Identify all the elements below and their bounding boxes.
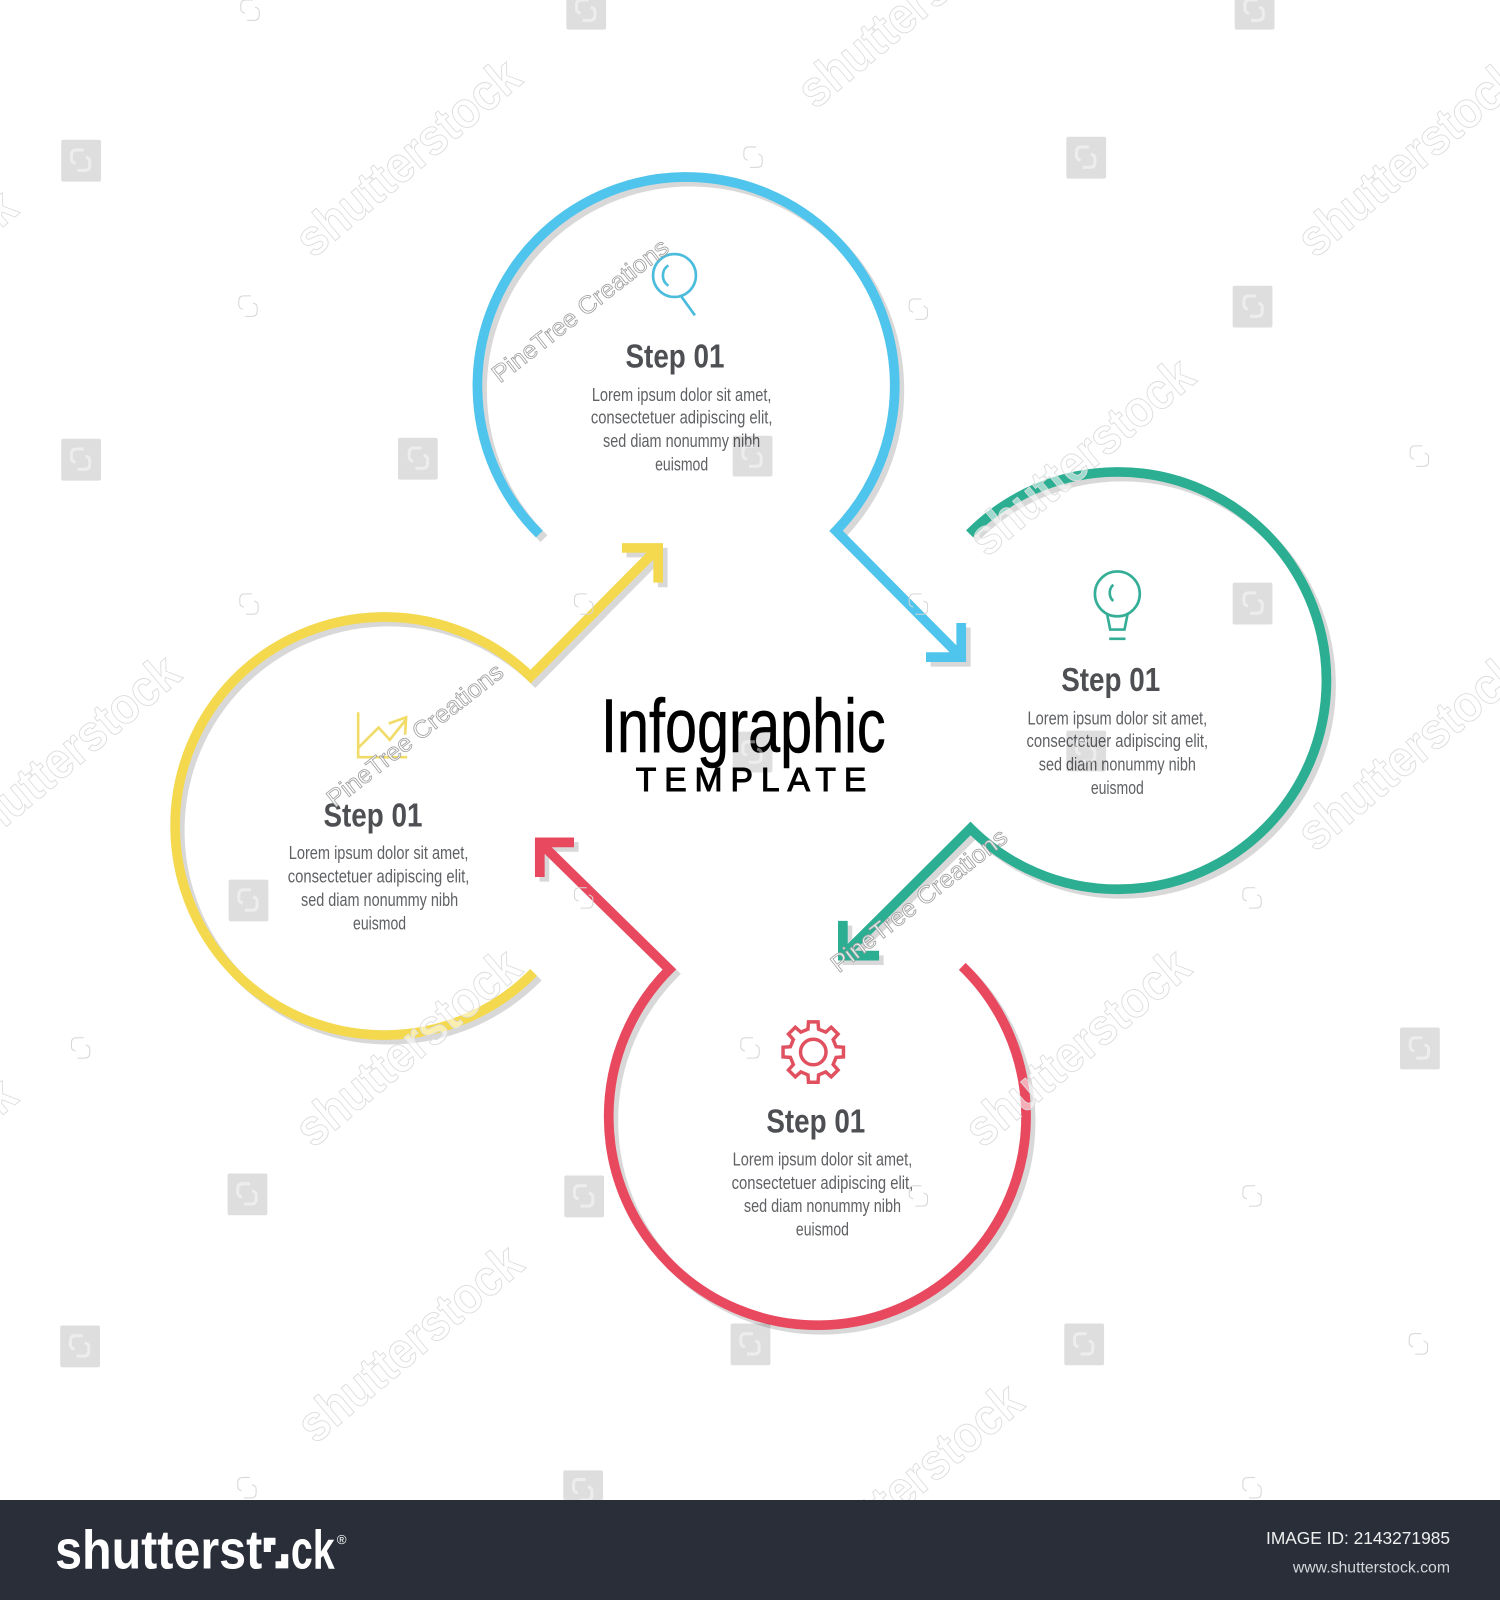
text block: blue step: euismod bbox=[655, 453, 708, 474]
icon: growth chart bbox=[358, 712, 407, 757]
footer logo: shutterst bbox=[55, 1518, 262, 1580]
panel: step blue (top) bbox=[477, 177, 966, 662]
text block: yellow step: sed diam nonummy nibh bbox=[301, 889, 458, 910]
red loop with arrow bbox=[540, 842, 1031, 1330]
footer logo: o bbox=[264, 1518, 298, 1580]
blue loop with arrow bbox=[477, 177, 966, 662]
watermark: PineTree Creations: PineTree Creations bbox=[322, 658, 509, 813]
heading: step 01: Step 01 bbox=[323, 798, 422, 835]
watermark: shutterstock wordmarks: shutterstock bbox=[286, 1232, 534, 1453]
watermark: PineTree Creations: PineTree Creations bbox=[826, 824, 1013, 978]
footer band bbox=[0, 1500, 1500, 1600]
text block: yellow step: Lorem ipsum dolor sit amet, bbox=[289, 842, 468, 863]
watermark: shutterstock wordmarks: shutterstock bbox=[957, 345, 1205, 567]
footer logo: ck bbox=[291, 1518, 335, 1580]
icon: gear bbox=[783, 1022, 843, 1082]
panel: step red (bottom) bbox=[540, 842, 1031, 1330]
green loop with arrow bbox=[843, 472, 1331, 960]
text block: yellow step: consectetuer adipiscing elit, bbox=[288, 866, 469, 887]
icon: magnifier bbox=[653, 254, 696, 315]
yellow loop with arrow bbox=[175, 548, 663, 1040]
text block: blue step: Lorem ipsum dolor sit amet, bbox=[592, 384, 771, 405]
text block: green step bbox=[1027, 707, 1208, 798]
watermark: shutterstock wordmarks: shutterstock bbox=[284, 46, 532, 268]
watermark: PineTree Creations bbox=[322, 234, 1013, 978]
text block: green step: euismod bbox=[1091, 777, 1144, 798]
icon: light bulb bbox=[1095, 571, 1140, 639]
watermark: shutterstock wordmarks: shutterstock bbox=[953, 936, 1201, 1157]
image id: IMAGE ID: 2143271985 bbox=[1266, 1528, 1450, 1548]
heading: step 01: Step 01 bbox=[626, 338, 724, 375]
heading: step 01: Step 01 bbox=[1061, 662, 1160, 699]
text block: red step: Lorem ipsum dolor sit amet, bbox=[733, 1148, 912, 1169]
logo registered mark: ® bbox=[337, 1532, 347, 1547]
panel: step yellow (left) bbox=[175, 548, 663, 1040]
text block: red step: euismod bbox=[796, 1219, 849, 1240]
text block: blue step: sed diam nonummy nibh bbox=[603, 430, 760, 451]
panel: step green (right) bbox=[843, 472, 1331, 960]
text block: red step bbox=[732, 1148, 913, 1240]
watermark: PineTree Creations: PineTree Creations bbox=[487, 234, 674, 388]
title: Infographic bbox=[601, 684, 886, 769]
watermark: shutterstock wordmarks: shutterstock bbox=[786, 1371, 1034, 1592]
text block: blue step bbox=[591, 384, 772, 474]
text block: blue step: consectetuer adipiscing elit, bbox=[591, 406, 772, 427]
watermark: shutterstock wordmarks: shutterstock bbox=[284, 936, 532, 1157]
text block: green step: consectetuer adipiscing elit, bbox=[1027, 730, 1208, 751]
text block: red step: consectetuer adipiscing elit, bbox=[732, 1172, 913, 1193]
text block: yellow step: euismod bbox=[353, 913, 406, 934]
subtitle: TEMPLATE bbox=[636, 762, 866, 799]
title bbox=[601, 684, 886, 799]
text block: green step: sed diam nonummy nibh bbox=[1039, 753, 1196, 774]
text block: red step: sed diam nonummy nibh bbox=[744, 1195, 901, 1216]
text block: green step: Lorem ipsum dolor sit amet, bbox=[1028, 707, 1207, 728]
heading: step 01: Step 01 bbox=[766, 1104, 865, 1141]
text block: yellow step bbox=[288, 842, 469, 934]
website: www.shutterstock.com bbox=[1292, 1559, 1450, 1576]
